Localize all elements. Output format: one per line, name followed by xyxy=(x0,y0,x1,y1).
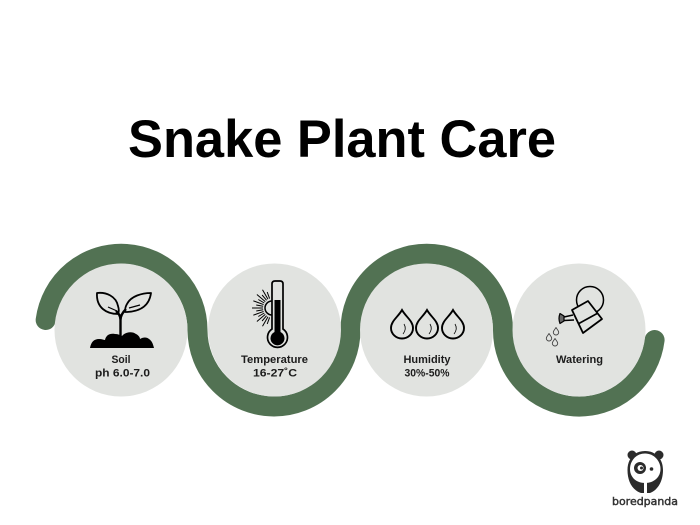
soil background circle xyxy=(54,264,188,396)
serpentine green ribbon xyxy=(46,254,655,407)
humidity range: 30%-50% xyxy=(404,368,450,380)
soil ph range: ph 6.0-7.0 xyxy=(95,368,150,380)
panel: humidity xyxy=(360,264,493,396)
icon: watering can xyxy=(546,286,604,346)
watering background circle xyxy=(512,264,646,396)
icon: seedling in soil xyxy=(90,293,154,348)
logo wordmark: boredpanda xyxy=(612,496,678,508)
title: Snake Plant Care xyxy=(128,110,556,169)
soil label: Soil xyxy=(112,354,130,366)
logo: boredpanda xyxy=(612,450,678,508)
humidity background circle xyxy=(360,264,493,396)
icon: thermometer with sun xyxy=(252,281,287,347)
temperature label: Temperature xyxy=(241,354,308,366)
icon: panda head xyxy=(628,450,664,493)
temperature range: 16-27˚C xyxy=(253,368,297,380)
temperature background circle xyxy=(208,264,341,396)
panel: watering xyxy=(512,264,646,396)
watering label: Watering xyxy=(556,354,603,366)
panel: temperature xyxy=(208,264,341,396)
panel: soil xyxy=(54,264,188,396)
icon: three water drops xyxy=(391,310,464,339)
humidity label: Humidity xyxy=(404,354,451,366)
